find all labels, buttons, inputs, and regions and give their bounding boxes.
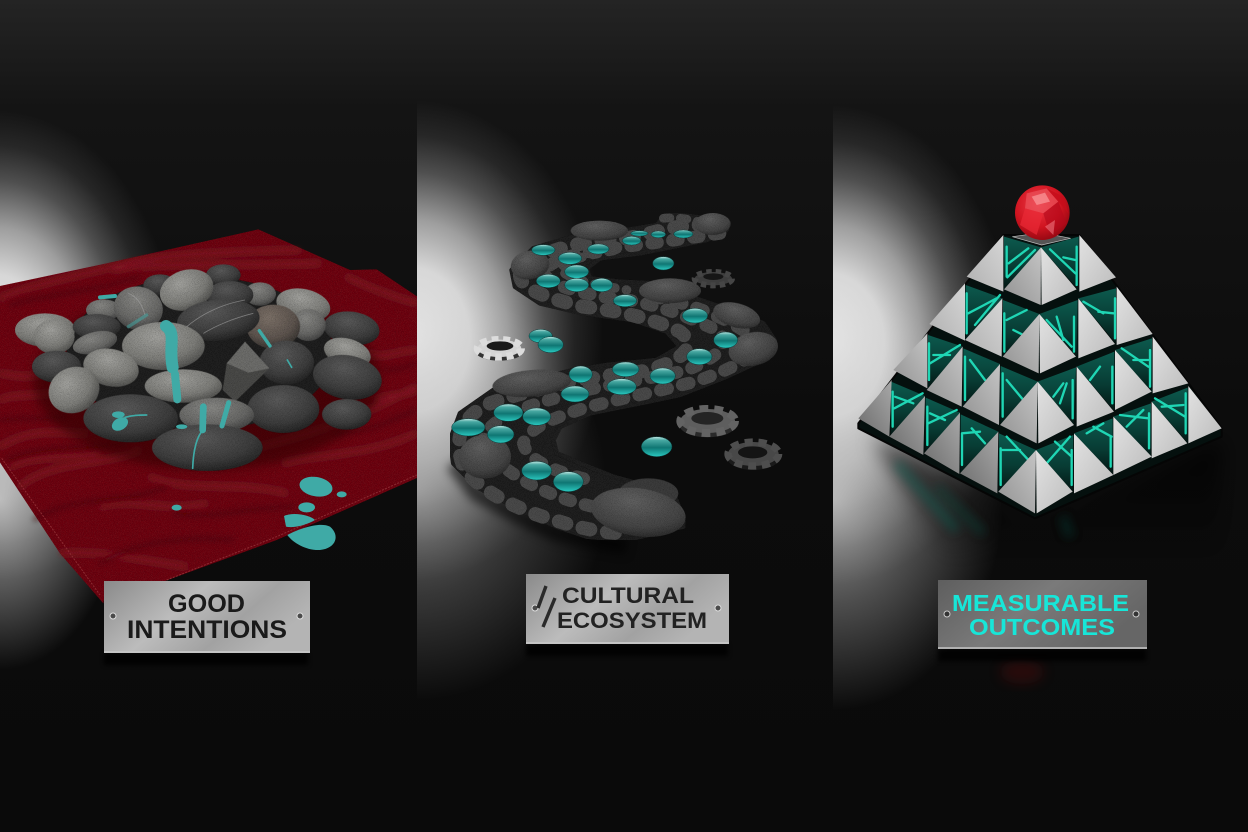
- panel 1 background glow: [0, 0, 417, 662]
- gear: dark top: [695, 272, 732, 285]
- teal windows: [891, 237, 1188, 492]
- centre pyramids: [998, 247, 1077, 513]
- stone veins: [128, 293, 253, 333]
- teal glass beads: [452, 230, 738, 492]
- lower left metal faces: [858, 380, 998, 493]
- ruby sphere: [1015, 185, 1070, 240]
- pyramid dark base: [858, 235, 1222, 518]
- gear: dark lower: [727, 442, 779, 470]
- teal sprout and drips: [109, 411, 347, 550]
- ruby plate: [1012, 233, 1071, 245]
- teal streams on stones: [100, 296, 292, 468]
- gear: grey large: [680, 409, 736, 437]
- plaque: cultural ecosystem: ECOSYSTEM: [557, 608, 707, 633]
- plaque: good intentions: [104, 581, 310, 665]
- panel: cultural ecosystem: [417, 0, 833, 682]
- cloth and stone pile: [0, 229, 420, 603]
- plaque: good intentions: INTENTIONS: [127, 616, 287, 644]
- panel 2 background glow: [417, 0, 833, 682]
- stone path with beads and gears: [450, 213, 781, 547]
- icon: slanted bars: [538, 586, 555, 627]
- stone pile: [15, 263, 385, 471]
- gear: silver: [476, 340, 523, 361]
- plaque: measurable outcomes: OUTCOMES: [969, 614, 1115, 640]
- panel: good intentions: [0, 0, 417, 662]
- plaque: cultural ecosystem: [526, 574, 729, 656]
- plaque: measurable outcomes: [938, 580, 1147, 684]
- pyramid reflection: [868, 436, 1072, 538]
- pile shadow: [33, 290, 380, 470]
- pyramid with ruby: [858, 185, 1222, 563]
- panel 3 background glow: [833, 0, 1248, 698]
- neon lines: [893, 247, 1186, 485]
- left-side metal faces: [893, 235, 1003, 425]
- panel: measurable outcomes: [833, 0, 1248, 698]
- winding cobblestone path: [450, 213, 777, 540]
- path shadow: [453, 463, 627, 547]
- red velvet cloth: [0, 229, 420, 603]
- plaque: measurable outcomes: MEASURABLE: [952, 590, 1129, 616]
- plaque: cultural ecosystem: CULTURAL: [562, 583, 694, 608]
- plaque: good intentions: GOOD: [168, 590, 245, 618]
- cloth hem stitching: [2, 458, 417, 595]
- right-side metal faces: [1074, 235, 1222, 493]
- flat stones along path: [459, 213, 781, 543]
